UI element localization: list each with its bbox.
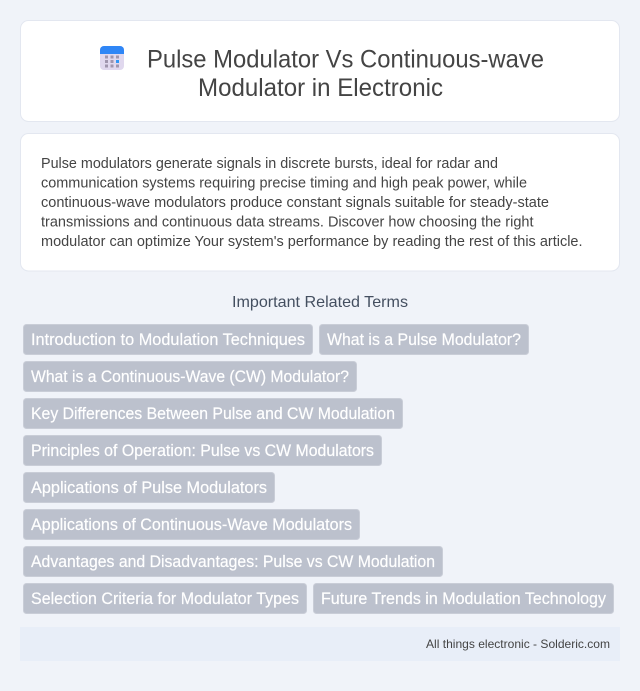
summary text: modulator can optimize Your system's performance by reading the rest of this article. bbox=[41, 234, 582, 250]
summary text: communication systems requiring precise timing and high peak power, while bbox=[41, 176, 527, 192]
tag: cw modulator: What is a Continuous-Wave (CW) Modulator? bbox=[31, 368, 349, 386]
panel: header card bbox=[20, 20, 620, 122]
footer bbox=[20, 627, 620, 661]
tag: cw modulator bbox=[24, 362, 356, 392]
tag: principles bbox=[24, 436, 382, 466]
tag: key differences: Key Differences Between Pulse and CW Modulation bbox=[31, 405, 395, 423]
tag: pulse applications: Applications of Pulse Modulators bbox=[31, 479, 267, 497]
summary text: Pulse modulators generate signals in discrete bursts, ideal for radar and bbox=[41, 156, 498, 172]
tag: future trends: Future Trends in Modulation Technology bbox=[321, 590, 607, 608]
tag list bbox=[24, 324, 614, 614]
tag: pulse modulator bbox=[320, 324, 528, 354]
tag: cw applications bbox=[24, 510, 360, 540]
tag: future trends bbox=[314, 584, 614, 614]
tag: introduction: Introduction to Modulation Techniques bbox=[31, 331, 305, 349]
tag: advantages: Advantages and Disadvantages: Pulse vs CW Modulation bbox=[31, 553, 435, 571]
title: Modulator in Electronic bbox=[198, 74, 443, 102]
tag: selection criteria bbox=[24, 584, 306, 614]
heading: important related terms: Important Related Terms bbox=[232, 294, 408, 311]
tag: pulse applications bbox=[24, 472, 274, 502]
tag: advantages bbox=[24, 546, 442, 576]
tag: key differences bbox=[24, 398, 402, 428]
tag: pulse modulator: What is a Pulse Modulator? bbox=[327, 331, 521, 349]
summary text: continuous-wave modulators produce constant signals suitable for steady-state bbox=[41, 195, 549, 211]
summary text: transmissions and continuous data streams. Discover how choosing the right bbox=[41, 214, 534, 230]
panel: summary card bbox=[20, 134, 620, 271]
icon: calendar bbox=[100, 46, 124, 70]
tag: selection criteria: Selection Criteria for Modulator Types bbox=[31, 590, 299, 608]
tag: cw applications: Applications of Continuous-Wave Modulators bbox=[31, 516, 352, 534]
tag: principles: Principles of Operation: Pulse vs CW Modulators bbox=[31, 442, 374, 460]
tag: introduction bbox=[24, 324, 312, 354]
title: Pulse Modulator Vs Continuous-wave bbox=[147, 46, 544, 74]
footer: All things electronic - Solderic.com bbox=[426, 637, 610, 651]
